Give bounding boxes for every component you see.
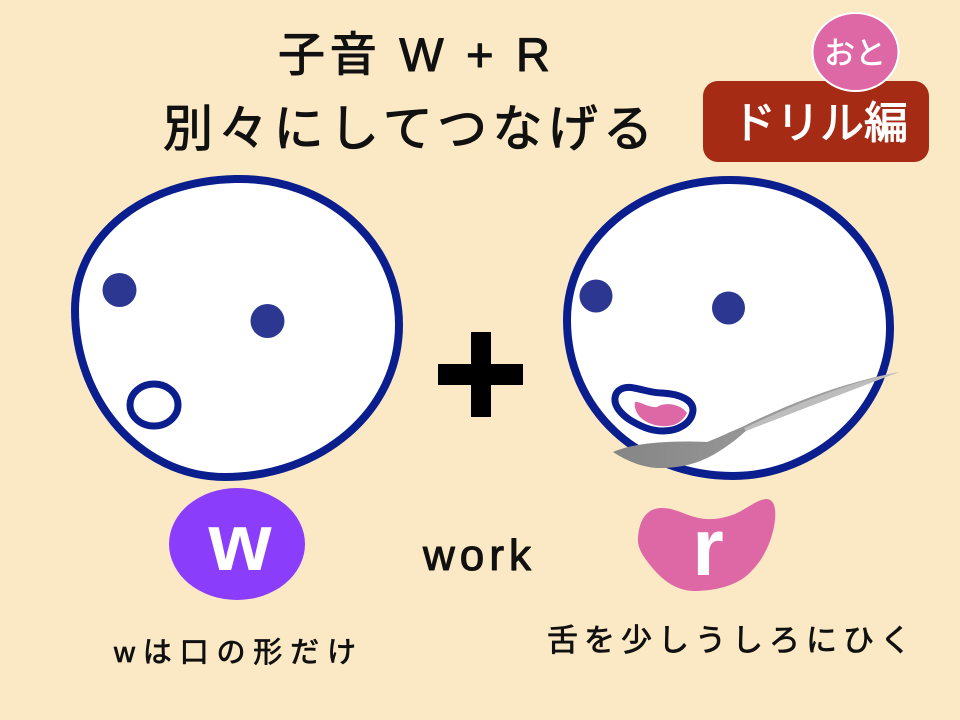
badge: oto — [812, 13, 898, 91]
r blob — [638, 499, 775, 593]
title: 別々にしてつなげる — [163, 101, 653, 157]
badge: drill edition — [703, 81, 929, 162]
left eye — [580, 280, 612, 312]
r blob: r — [692, 503, 724, 593]
badge: oto: おと — [824, 36, 886, 71]
caption: r: 舌を少しうしろにひく — [547, 623, 911, 658]
icon: spoon — [613, 372, 899, 468]
left eye — [102, 273, 136, 307]
example word: work — [422, 531, 532, 580]
title: 子音 W + R — [278, 28, 550, 81]
w blob: w — [207, 498, 272, 588]
w blob — [169, 488, 305, 600]
badge: drill edition: ドリル編 — [732, 99, 908, 148]
title — [163, 28, 653, 157]
mouth with tongue — [615, 387, 693, 431]
caption: w: wは口の形だけ — [113, 637, 356, 669]
right eye — [250, 304, 284, 338]
left face — [75, 179, 399, 477]
right face — [567, 180, 890, 476]
right eye — [712, 292, 745, 324]
plus sign — [438, 332, 523, 417]
mouth: w shape — [130, 384, 178, 426]
